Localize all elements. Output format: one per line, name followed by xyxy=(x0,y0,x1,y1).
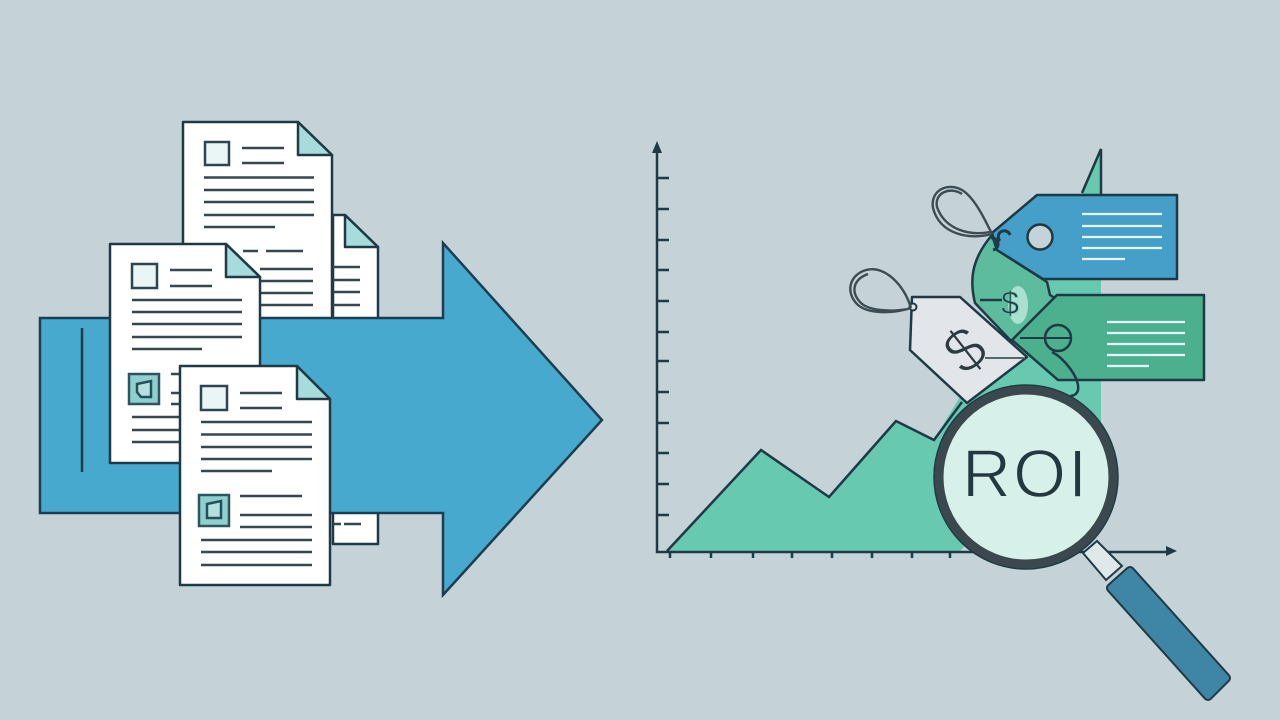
price tag: white xyxy=(850,269,1027,403)
lens xyxy=(939,390,1113,564)
chart: area xyxy=(667,149,1101,551)
chart: axes xyxy=(652,141,1177,558)
tag string xyxy=(850,269,911,312)
icon: image thumbnail xyxy=(199,495,229,526)
tag string xyxy=(933,187,992,236)
magnifying glass xyxy=(934,385,1226,696)
price tag: white: $ xyxy=(930,313,1000,388)
icon: image thumbnail xyxy=(129,374,159,404)
document: front left xyxy=(110,244,260,463)
document: back top xyxy=(183,122,332,330)
handle xyxy=(1111,571,1226,696)
price tag: front green xyxy=(1012,295,1204,396)
price tag: middle green: $ xyxy=(1001,285,1019,321)
label: ROI: ROI xyxy=(962,436,1087,512)
document: front right xyxy=(180,366,330,585)
handle neck xyxy=(1083,541,1122,580)
document: back right xyxy=(333,215,378,544)
price tag: blue xyxy=(933,187,1177,279)
price tag: middle green xyxy=(972,235,1058,342)
arrow: large blue xyxy=(40,243,602,595)
